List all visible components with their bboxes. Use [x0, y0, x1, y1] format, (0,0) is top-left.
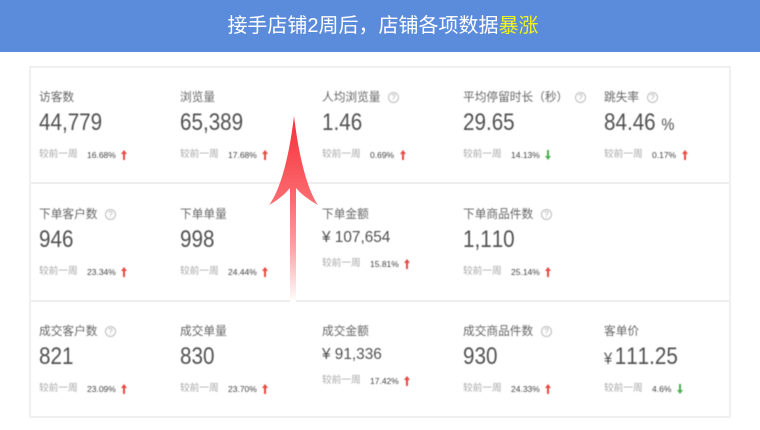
metric: 成交商品件数: [463, 324, 552, 395]
metric: 下单金额: 下单金额: [322, 208, 369, 221]
metric: 浏览量: 较前一周: [180, 149, 219, 160]
metric: 下单单量: [180, 207, 268, 278]
metric: 成交商品件数: 930: [463, 343, 497, 370]
metric: 下单客户数: 较前一周: [39, 266, 78, 277]
metric: 客单价: 较前一周: [604, 383, 643, 394]
metric: 下单客户数: [39, 207, 128, 278]
metric: 成交单量: 830: [180, 343, 214, 370]
metric: 人均浏览量: [322, 90, 406, 161]
metric: 下单金额: [322, 207, 410, 270]
metric: 跳失率: 0.17%: [652, 150, 676, 160]
metric: 人均浏览量: 0.69%: [370, 150, 394, 160]
metric: 下单商品件数: 较前一周: [463, 266, 502, 277]
metric: 平均停留时长(秒): 29.65: [463, 109, 515, 136]
metric: 客单价: ¥111.25: [604, 343, 678, 370]
metric: 浏览量: 17.68%: [228, 150, 257, 160]
metric: 下单客户数: 946: [39, 226, 73, 253]
metric: 成交金额: ¥ 91,336: [322, 346, 382, 363]
metric: 下单金额: 15.81%: [370, 259, 399, 269]
metric: 成交金额: 17.42%: [370, 376, 399, 386]
metric: 下单单量: 998: [180, 226, 214, 253]
metric: 下单单量: 下单单量: [180, 208, 227, 221]
metric: 客单价: 4.6%: [652, 384, 671, 394]
metric: 下单商品件数: ?: [544, 210, 549, 219]
metric: 下单商品件数: [463, 207, 552, 278]
metric: 成交金额: 成交金额: [322, 325, 369, 338]
metric: 访客数: 较前一周: [39, 149, 78, 160]
metric: 客单价: 客单价: [604, 325, 639, 338]
metric: 跳失率: 84.46 %: [604, 109, 674, 136]
metric: 人均浏览量: 较前一周: [322, 149, 361, 160]
metric: 跳失率: 跳失率: [604, 91, 639, 104]
metric: 成交客户数: 821: [39, 343, 73, 370]
metric: 成交金额: [322, 324, 410, 387]
metric: 跳失率: ?: [650, 93, 655, 102]
metric: 人均浏览量: 1.46: [322, 109, 362, 136]
panel: metrics card: [29, 66, 731, 418]
metric: 人均浏览量: ?: [391, 93, 396, 102]
metric: 下单客户数: 23.34%: [87, 267, 116, 277]
metric: 人均浏览量: 人均浏览量: [322, 91, 380, 104]
metric: 成交商品件数: 24.33%: [511, 384, 540, 394]
metric: 平均停留时长(秒): 14.13%: [511, 150, 540, 160]
metric: 访客数: [38, 90, 128, 161]
metric: 平均停留时长(秒): 较前一周: [463, 149, 502, 160]
metric: 浏览量: [180, 90, 268, 161]
metric: 平均停留时长(秒): [463, 90, 586, 160]
arrow: upward gradient arrow: [269, 116, 318, 302]
metric: 成交客户数: 较前一周: [39, 383, 78, 394]
metric: 成交商品件数: 较前一周: [463, 383, 502, 394]
metric: 浏览量: 浏览量: [180, 91, 215, 104]
metric: 成交单量: 23.70%: [228, 384, 257, 394]
metric: 成交金额: 较前一周: [322, 375, 361, 386]
metric: 成交客户数: 23.09%: [87, 384, 116, 394]
metric: 访客数: 16.68%: [87, 150, 116, 160]
metric: 成交单量: [180, 324, 268, 395]
metric: 下单商品件数: 25.14%: [511, 267, 540, 277]
metric: 平均停留时长(秒): ?: [578, 93, 583, 102]
metric: 成交商品件数: 成交商品件数: [463, 325, 533, 338]
metric: 访客数: 44,779: [39, 109, 102, 136]
metric: 成交客户数: 成交客户数: [39, 325, 97, 338]
metric: 下单客户数: 下单客户数: [39, 208, 97, 221]
metric: 下单客户数: ?: [108, 210, 113, 219]
metric: 下单金额: 较前一周: [322, 258, 361, 269]
metric: 成交客户数: ?: [108, 327, 113, 336]
title banner: [0, 0, 760, 52]
metric: 浏览量: 65,389: [180, 109, 243, 136]
metric: 成交客户数: [39, 324, 128, 395]
metric: 下单商品件数: 1,110: [463, 226, 515, 253]
metric: 访客数: 访客数: [39, 91, 74, 104]
title banner: 接手店铺2周后，店铺各项数据暴涨: [227, 15, 539, 37]
metric: 平均停留时长(秒): 平均停留时长（秒）: [463, 91, 568, 104]
metric: 下单单量: 较前一周: [180, 266, 219, 277]
metric: 成交单量: 较前一周: [180, 383, 219, 394]
metric: 成交单量: 成交单量: [180, 325, 227, 338]
metric: 客单价: [604, 324, 684, 394]
metric: 跳失率: 较前一周: [604, 149, 643, 160]
metric: 跳失率: [604, 90, 688, 161]
metric: 下单单量: 24.44%: [228, 267, 257, 277]
metric: 下单商品件数: 下单商品件数: [463, 208, 533, 221]
metric: 成交商品件数: ?: [544, 327, 549, 336]
metric: 下单金额: ¥ 107,654: [322, 229, 390, 246]
